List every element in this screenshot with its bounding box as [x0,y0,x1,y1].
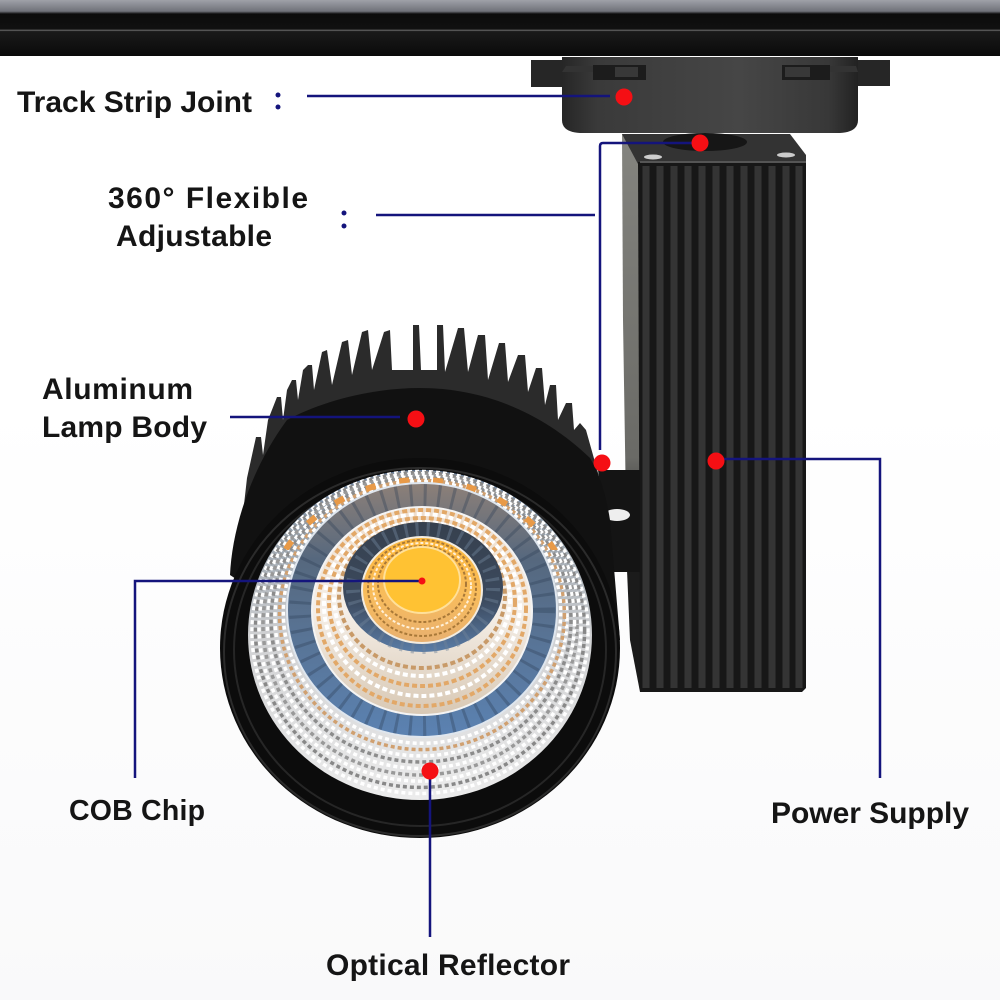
optical reflector [248,470,592,800]
dark ring [343,522,503,652]
label: 360 flexible adjustable [108,182,308,253]
power supply housing [622,133,806,692]
leader: aluminum lamp body [230,410,424,428]
label: aluminum lamp body [42,373,207,444]
label: COB chip: COB Chip [69,795,205,827]
leader: track strip joint [276,88,632,110]
label: optical reflector: Optical Reflector [326,949,570,982]
label: track strip joint: Track Strip Joint [17,86,252,119]
blue ring [287,483,557,737]
leader: COB chip [135,578,426,778]
lamp body [230,388,620,700]
label: aluminum lamp body: Aluminum [42,373,193,406]
leader: optical reflector [422,762,438,937]
label: 360 flexible adjustable: Adjustable [116,220,272,253]
orange cone [362,537,482,643]
track adapter [531,57,890,133]
inner faceted ring [312,507,532,715]
leader: 360 flexible adjustable [342,134,708,472]
label: power supply: Power Supply [771,797,969,830]
pivot joint [598,470,640,572]
track rail [0,0,1000,56]
label: aluminum lamp body: Lamp Body [42,411,207,444]
leader: power supply [708,452,880,778]
label: 360 flexible adjustable: 360° Flexible [108,182,308,215]
COB chip [384,547,460,613]
lamp front bezel [220,458,620,838]
heat sink fins [240,325,600,540]
